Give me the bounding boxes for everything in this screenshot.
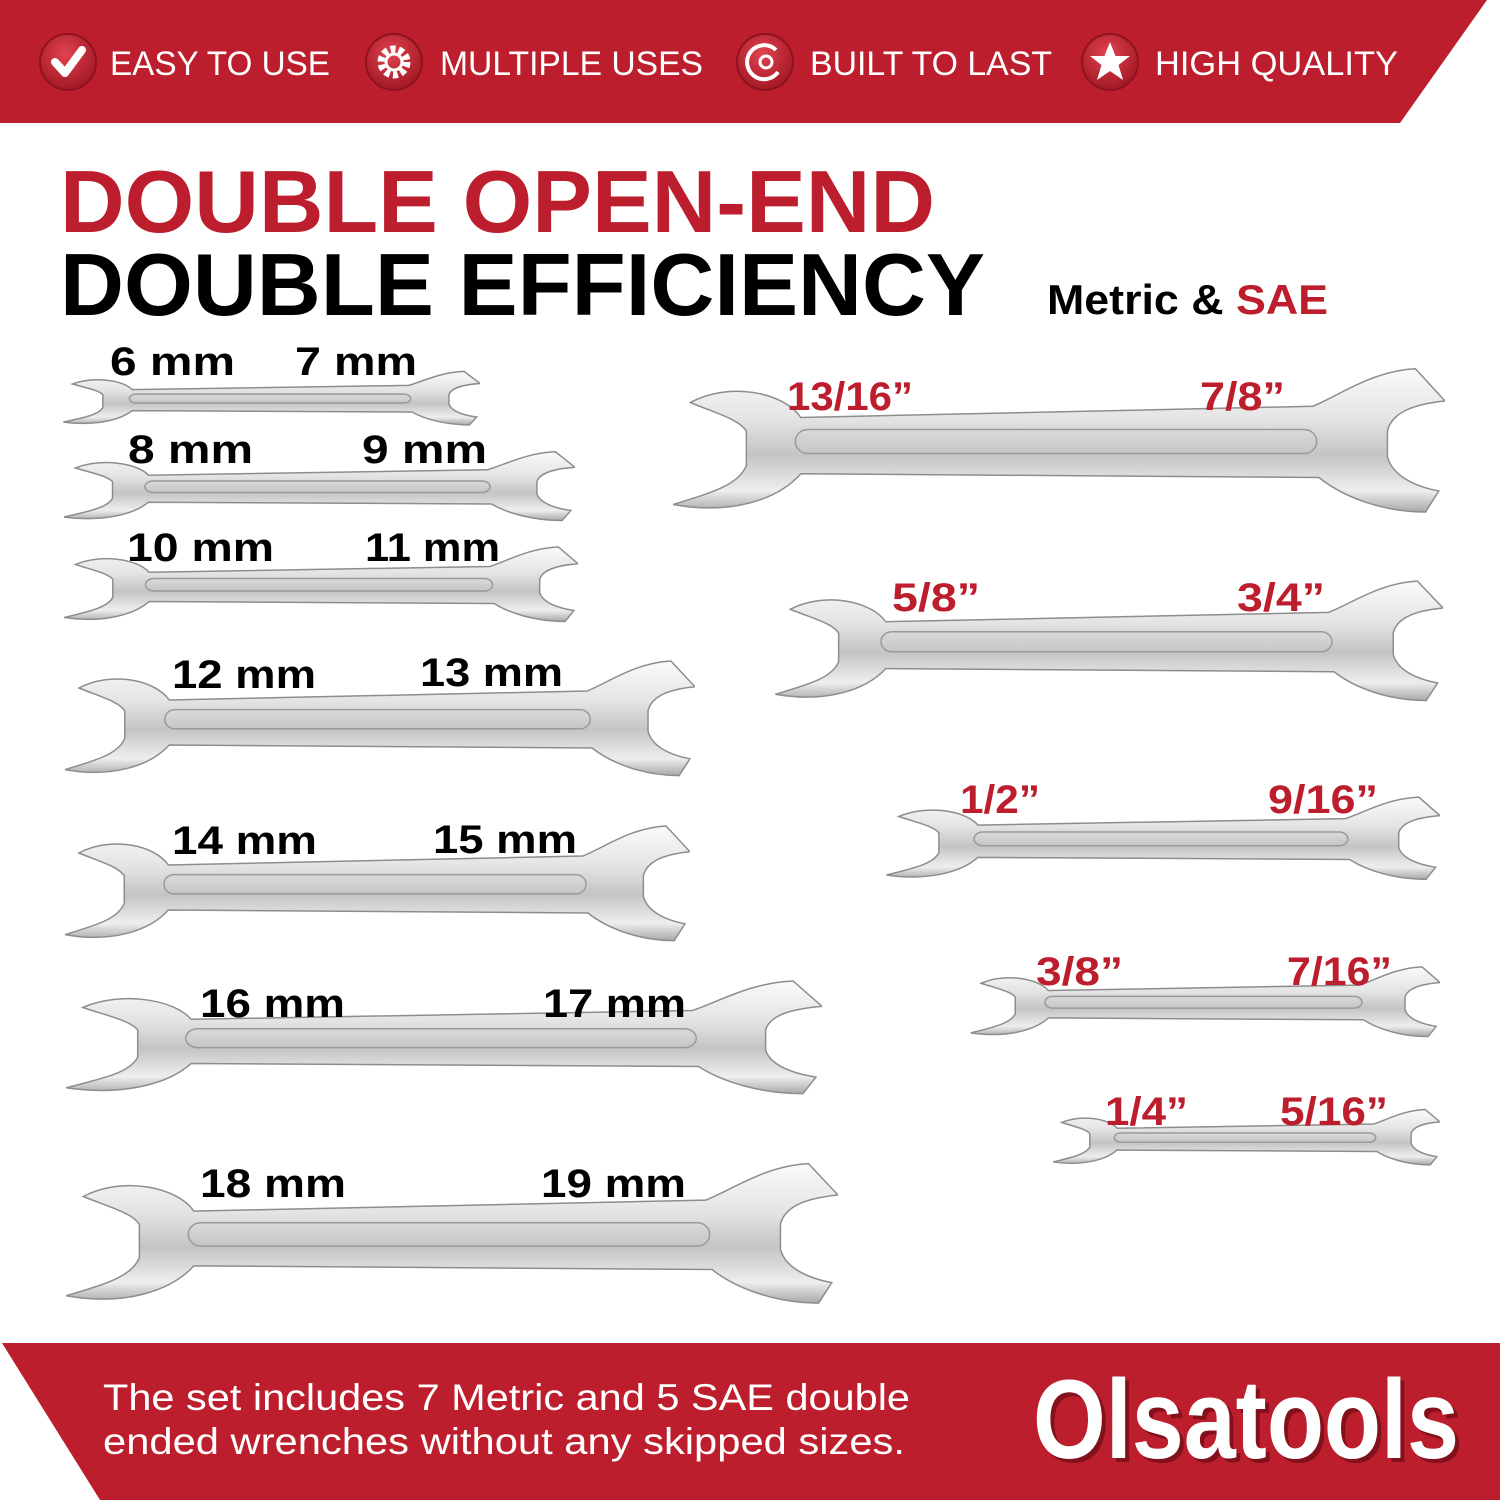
metric labels: 17 mm [543,982,686,1026]
SAE labels [787,375,1392,1134]
feature: easy to use [40,34,330,90]
metric labels: 19 mm [541,1162,686,1206]
SAE labels: 1/4” [1105,1090,1188,1134]
metric labels: 10 mm [127,526,274,570]
metric labels: 11 mm [365,526,500,570]
metric labels: 18 mm [200,1162,346,1206]
metric labels: 13 mm [420,651,563,695]
metric labels: 14 mm [172,819,317,863]
description text: The set includes 7 Metric and 5 SAE double [103,1377,910,1418]
metric labels [110,340,686,1206]
subtitle: metric & SAE: Metric & SAE [1047,276,1328,323]
top banner [0,0,1487,123]
metric labels: 8 mm [128,428,253,472]
SAE labels: 13/16” [787,375,913,419]
feature: high quality [1082,34,1398,90]
feature: multiple uses [366,34,703,90]
title: DOUBLE EFFICIENCY [60,235,985,334]
metric labels: 9 mm [362,428,487,472]
title [60,152,985,334]
description text [103,1377,910,1462]
SAE labels: 7/8” [1200,375,1285,419]
feature: multiple uses: MULTIPLE USES [440,45,703,83]
SAE labels: 1/2” [960,778,1040,822]
metric labels: 7 mm [295,340,417,384]
SAE wrenches [673,369,1445,1165]
SAE labels: 3/4” [1237,576,1325,620]
metric labels: 6 mm [110,340,235,384]
SAE labels: 9/16” [1268,778,1378,822]
SAE labels: 7/16” [1287,950,1392,994]
metric labels: 15 mm [433,818,577,862]
metric labels: 12 mm [172,653,316,697]
bottom banner [2,1343,1500,1500]
SAE labels: 5/16” [1280,1090,1388,1134]
feature: high quality: HIGH QUALITY [1155,45,1398,83]
feature: built to last: BUILT TO LAST [810,45,1052,83]
feature: easy to use: EASY TO USE [110,45,330,83]
title: DOUBLE OPEN-END [60,152,935,251]
description text: ended wrenches without any skipped sizes. [103,1421,905,1462]
SAE labels: 5/8” [892,576,980,620]
feature: built to last [737,34,1052,90]
metric wrenches [63,371,838,1303]
metric labels: 16 mm [200,982,345,1026]
SAE labels: 3/8” [1036,950,1123,994]
